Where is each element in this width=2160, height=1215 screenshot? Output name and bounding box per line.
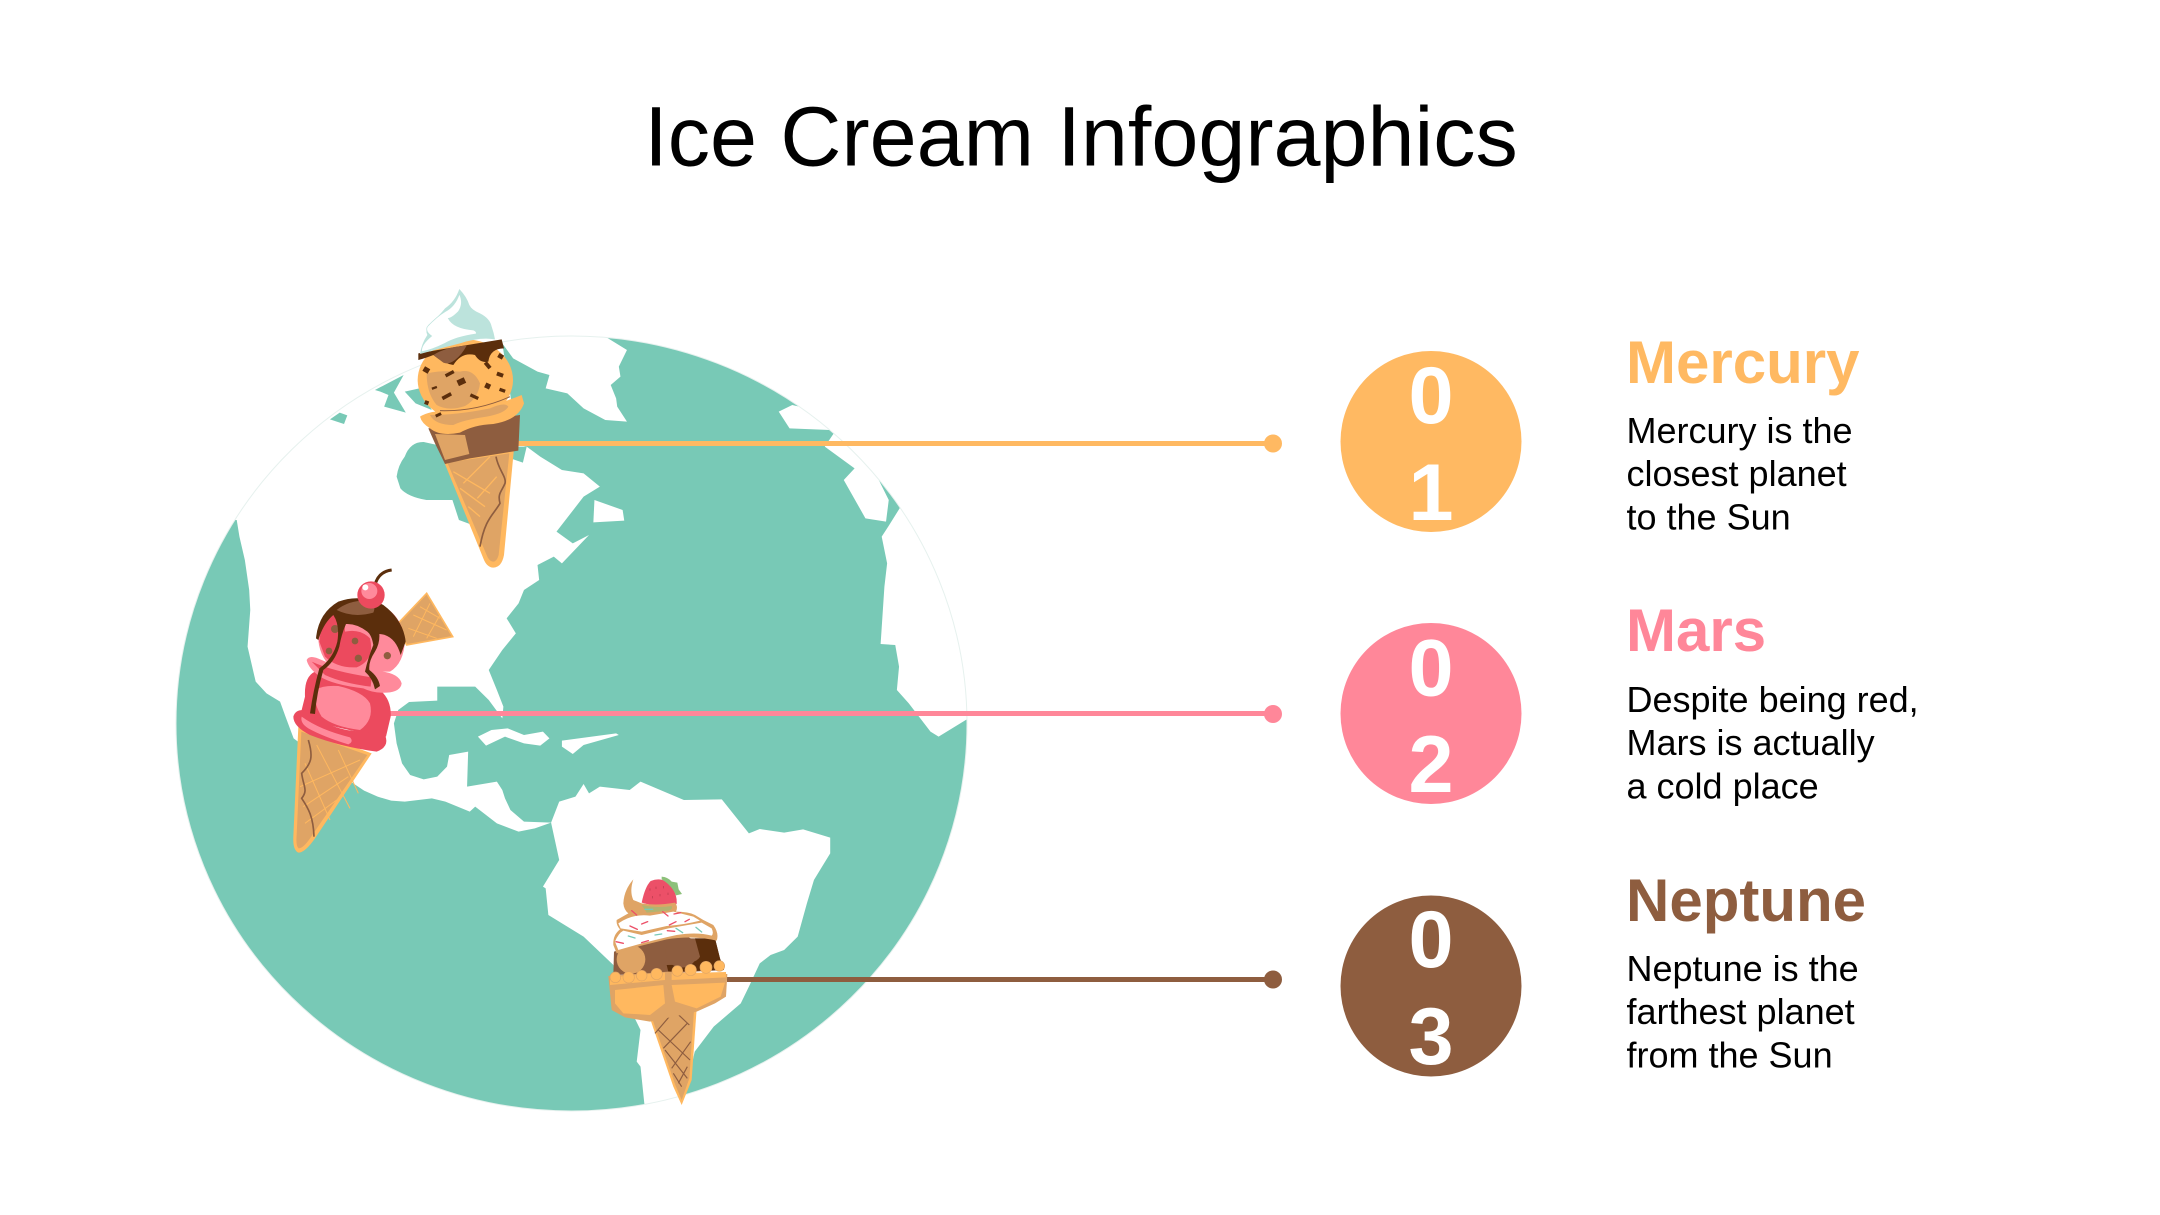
text block: Neptune: from the Sun: [1626, 1034, 1833, 1076]
text block: Mercury: Mercury: [1626, 329, 1860, 396]
number badge 02: 0: [1408, 624, 1454, 714]
connector line 3: [727, 970, 1282, 988]
number badge 01: 0: [1408, 351, 1454, 441]
text block: Neptune: farthest planet: [1626, 991, 1855, 1032]
globe map: [176, 303, 1028, 1113]
icon: sundae wafer ice cream: [608, 877, 727, 1105]
number badge 03: 0: [1408, 895, 1454, 985]
number badge 02: 2: [1408, 720, 1454, 810]
connector line 2: [390, 705, 1282, 723]
number badge 01: [1340, 351, 1522, 538]
text block: Mercury: [1626, 329, 1860, 538]
icon: strawberry cherry ice cream: [293, 570, 453, 853]
number badge 03: [1340, 895, 1522, 1082]
text block: Mars: [1626, 597, 1919, 806]
text block: Mars: Despite being red,: [1626, 679, 1919, 720]
text block: Neptune: Neptune is the: [1626, 948, 1859, 989]
text block: Mars: Mars is actually: [1626, 722, 1875, 763]
text block: Neptune: Neptune: [1626, 867, 1866, 934]
number badge 01: 1: [1408, 448, 1454, 538]
text block: Mercury: Mercury is the: [1626, 410, 1853, 451]
icon: mint chocolate chip ice cream: [418, 289, 524, 568]
text block: Mercury: closest planet: [1626, 453, 1847, 494]
connector line 1: [518, 434, 1282, 452]
number badge 03: 3: [1408, 992, 1454, 1082]
title: Ice Cream Infographics: [644, 90, 1518, 184]
text block: Mars: a cold place: [1626, 766, 1819, 806]
text block: Neptune: [1626, 867, 1866, 1076]
number badge 02: [1340, 623, 1522, 810]
text block: Mars: Mars: [1626, 597, 1766, 664]
text block: Mercury: to the Sun: [1626, 496, 1791, 538]
